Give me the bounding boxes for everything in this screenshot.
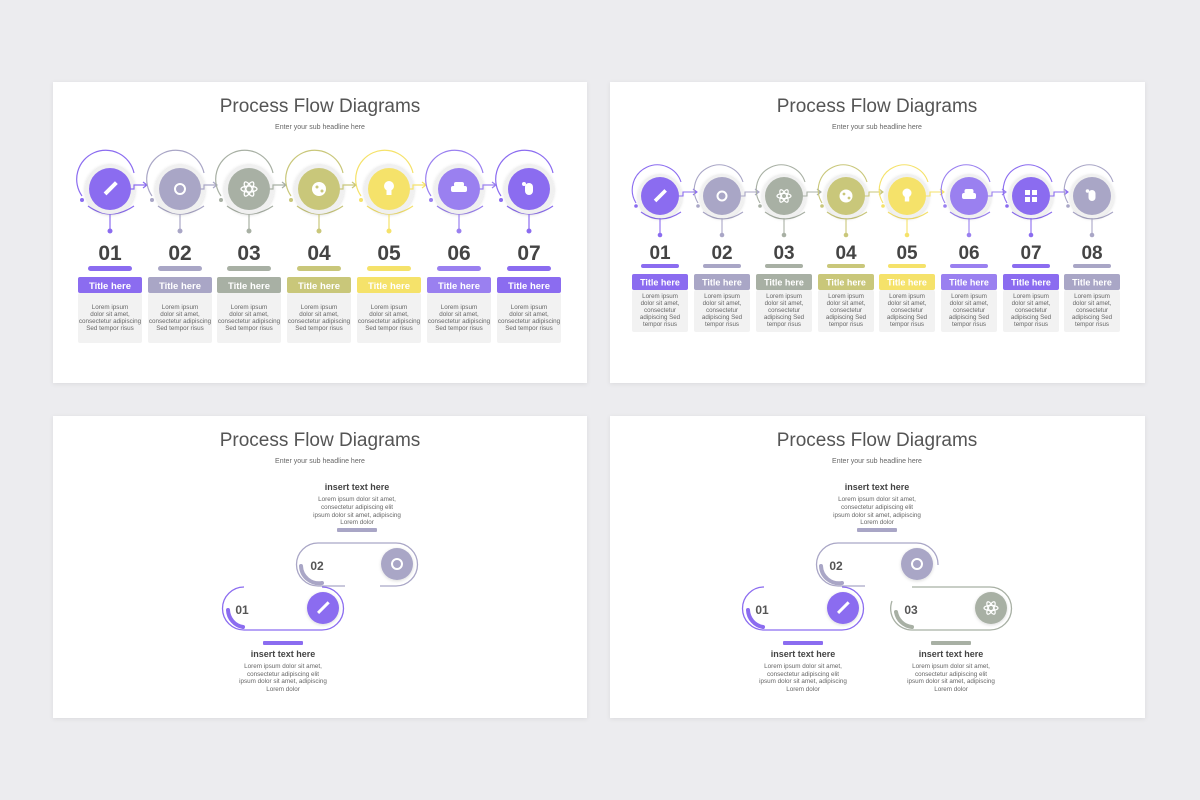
text block: top: Lorem ipsum dolor sit amet, <box>318 496 396 503</box>
step 04: dolor sit amet, <box>299 311 339 318</box>
step 04: Lorem ipsum <box>828 293 864 300</box>
step 05: dolor sit amet, <box>369 311 409 318</box>
step 02: 02 <box>168 242 192 265</box>
step 01 pill: 01 <box>235 603 249 617</box>
text block: bottom: ipsum dolor sit amet, adipiscing <box>239 678 327 685</box>
step 05: 05 <box>377 242 401 265</box>
text block: bottom-left <box>759 641 847 693</box>
text block: bottom-left: consectetur adipiscing elit <box>767 671 839 678</box>
step 05: Title here <box>368 281 410 292</box>
step 04: 04 <box>835 243 857 264</box>
step 05: consectetur adipiscing <box>358 318 421 325</box>
step 07: Lorem ipsum <box>511 304 547 311</box>
step 04: tempor risus <box>829 321 863 328</box>
text block: bottom-right <box>907 641 995 693</box>
step 01 <box>77 150 142 343</box>
text block: top: ipsum dolor sit amet, adipiscing <box>833 512 921 519</box>
step 01: Lorem ipsum <box>642 293 678 300</box>
step 01: tempor risus <box>643 321 677 328</box>
step 07: tempor risus <box>1014 321 1048 328</box>
step 03: adipiscing Sed <box>764 314 805 321</box>
step 04: Title here <box>826 278 866 288</box>
step 01: Lorem ipsum <box>92 304 128 311</box>
arrow <box>865 189 883 196</box>
step 01: consectetur <box>644 307 676 314</box>
text block: bottom: insert text here <box>251 649 315 659</box>
subtitle: Enter your sub headline here <box>275 458 365 465</box>
step 04: adipiscing Sed <box>826 314 867 321</box>
text block: bottom-right: consectetur adipiscing elit <box>915 671 987 678</box>
step 07: Title here <box>1011 278 1051 288</box>
step 02: dolor sit amet, <box>160 311 200 318</box>
step 02: consectetur adipiscing <box>149 318 212 325</box>
step 04: Sed tempor risus <box>295 325 343 332</box>
step 06: Lorem ipsum <box>951 293 987 300</box>
step 01 <box>632 165 688 332</box>
arrow <box>339 182 356 189</box>
step 02: 02 <box>711 243 733 264</box>
step 02: Title here <box>159 281 201 292</box>
step 03: Title here <box>764 278 804 288</box>
step 02: Title here <box>702 278 742 288</box>
step 04 <box>286 150 351 343</box>
step 03: consectetur adipiscing <box>218 318 281 325</box>
step 08: Lorem ipsum <box>1074 293 1110 300</box>
step 02: dolor sit amet, <box>703 300 742 307</box>
text block: bottom-right: insert text here <box>919 649 983 659</box>
step 04: consectetur adipiscing <box>288 318 351 325</box>
step 02 pill <box>296 543 417 586</box>
step 07: dolor sit amet, <box>1012 300 1051 307</box>
step 03 pill <box>891 587 1012 630</box>
step 01: Sed tempor risus <box>86 325 134 332</box>
step 01: 01 <box>98 242 122 265</box>
step 06: Title here <box>438 281 480 292</box>
text block: bottom-left: insert text here <box>771 649 835 659</box>
text block: top: ipsum dolor sit amet, adipiscing <box>313 512 401 519</box>
panel: top-left 7 steps <box>53 82 587 383</box>
step 03: Sed tempor risus <box>225 325 273 332</box>
step 06: 06 <box>447 242 471 265</box>
arrow <box>269 182 286 189</box>
step 05: dolor sit amet, <box>888 300 927 307</box>
step 08: tempor risus <box>1075 321 1109 328</box>
step 08: Title here <box>1072 278 1112 288</box>
text block: top <box>313 482 401 532</box>
step 05: tempor risus <box>890 321 924 328</box>
step 01: dolor sit amet, <box>90 311 130 318</box>
title: Process Flow Diagrams <box>220 430 420 451</box>
step 07: Lorem ipsum <box>1013 293 1049 300</box>
step 02: Lorem ipsum <box>162 304 198 311</box>
text block: top: Lorem ipsum dolor sit amet, <box>838 496 916 503</box>
step 04: 04 <box>307 242 331 265</box>
step 02: adipiscing Sed <box>702 314 743 321</box>
arrow <box>679 189 697 196</box>
text block: bottom-right: Lorem dolor <box>934 686 968 693</box>
text block: top: insert text here <box>325 482 389 492</box>
arrow <box>988 189 1006 196</box>
step 07: 07 <box>1020 243 1042 264</box>
step 01: consectetur adipiscing <box>79 318 142 325</box>
step 08: 08 <box>1081 243 1103 264</box>
step 06: dolor sit amet, <box>439 311 479 318</box>
step 02 pill: 02 <box>310 559 324 573</box>
step 07 <box>496 150 561 343</box>
step 02 pill: 02 <box>829 559 843 573</box>
step 04: dolor sit amet, <box>827 300 866 307</box>
step 05: consectetur <box>891 307 923 314</box>
step 06: consectetur <box>953 307 985 314</box>
text block: bottom-right: ipsum dolor sit amet, adipiscing <box>907 678 995 685</box>
step 06: adipiscing Sed <box>949 314 990 321</box>
text block: bottom <box>239 641 327 693</box>
title: Process Flow Diagrams <box>220 96 420 117</box>
title: Process Flow Diagrams <box>777 96 977 117</box>
step 06: Title here <box>949 278 989 288</box>
text block: bottom: Lorem ipsum dolor sit amet, <box>244 663 322 670</box>
step 07: Sed tempor risus <box>505 325 553 332</box>
text block: bottom: consectetur adipiscing elit <box>247 671 319 678</box>
step 02 pill <box>816 543 938 586</box>
step 05: Sed tempor risus <box>365 325 413 332</box>
step 03: tempor risus <box>767 321 801 328</box>
step 08: consectetur <box>1076 307 1108 314</box>
step 03: 03 <box>237 242 261 265</box>
step 02: Sed tempor risus <box>156 325 204 332</box>
step 08: adipiscing Sed <box>1072 314 1113 321</box>
step 05: Title here <box>887 278 927 288</box>
step 06: dolor sit amet, <box>950 300 989 307</box>
step 04: Lorem ipsum <box>301 304 337 311</box>
step 07: 07 <box>517 242 541 265</box>
arrow <box>741 189 759 196</box>
step 08: dolor sit amet, <box>1073 300 1112 307</box>
step 05: Lorem ipsum <box>889 293 925 300</box>
step 04: consectetur <box>830 307 862 314</box>
arrow <box>200 182 217 189</box>
arrow <box>130 182 147 189</box>
step 04: Title here <box>298 281 340 292</box>
step 02 <box>694 165 750 332</box>
step 03: Lorem ipsum <box>766 293 802 300</box>
step 07: adipiscing Sed <box>1011 314 1052 321</box>
subtitle: Enter your sub headline here <box>832 458 922 465</box>
step 01 pill: 01 <box>755 603 769 617</box>
step 01: Title here <box>89 281 131 292</box>
arrow <box>926 189 944 196</box>
step 05: Lorem ipsum <box>371 304 407 311</box>
step 03: dolor sit amet, <box>765 300 804 307</box>
step 01: 01 <box>649 243 671 264</box>
step 06 <box>941 165 997 332</box>
step 02 <box>147 150 212 343</box>
text block: top: consectetur adipiscing elit <box>321 504 393 511</box>
step 07: dolor sit amet, <box>509 311 549 318</box>
step 01: adipiscing Sed <box>640 314 681 321</box>
step 01: Title here <box>640 278 680 288</box>
text block: bottom-left: ipsum dolor sit amet, adipiscing <box>759 678 847 685</box>
step 03 <box>756 165 812 332</box>
step 02: consectetur <box>706 307 738 314</box>
step 05: 05 <box>896 243 918 264</box>
text block: bottom-left: Lorem dolor <box>786 686 820 693</box>
text block: top: consectetur adipiscing elit <box>841 504 913 511</box>
step 05 <box>356 150 421 343</box>
step 07: Title here <box>508 281 550 292</box>
step 07: consectetur adipiscing <box>498 318 561 325</box>
step 06: consectetur adipiscing <box>428 318 491 325</box>
step 02: Lorem ipsum <box>704 293 740 300</box>
text block: top <box>833 482 921 532</box>
arrow <box>803 189 821 196</box>
step 05 <box>879 165 935 332</box>
arrow <box>1050 189 1068 196</box>
step 01: dolor sit amet, <box>641 300 680 307</box>
step 06: Sed tempor risus <box>435 325 483 332</box>
arrow <box>479 182 496 189</box>
arrow <box>409 182 426 189</box>
text block: top: insert text here <box>845 482 909 492</box>
step 01 pill <box>222 587 344 630</box>
step 07: consectetur <box>1015 307 1047 314</box>
step 04 <box>818 165 874 332</box>
step 06: tempor risus <box>952 321 986 328</box>
step 05: adipiscing Sed <box>887 314 928 321</box>
panel: bottom-right 3 steps <box>610 416 1145 718</box>
text block: top: Lorem dolor <box>340 519 374 526</box>
step 06: Lorem ipsum <box>441 304 477 311</box>
subtitle: Enter your sub headline here <box>832 124 922 131</box>
step 02: tempor risus <box>705 321 739 328</box>
text block: top: Lorem dolor <box>860 519 894 526</box>
step 08 <box>1064 165 1120 332</box>
step 03 <box>216 150 281 343</box>
step 03: Title here <box>228 281 270 292</box>
step 03: dolor sit amet, <box>229 311 269 318</box>
text block: bottom-right: Lorem ipsum dolor sit amet, <box>912 663 990 670</box>
panel: bottom-left 2 steps <box>53 416 587 718</box>
step 03: 03 <box>773 243 795 264</box>
step 06 <box>426 150 491 343</box>
text block: bottom: Lorem dolor <box>266 686 300 693</box>
step 07 <box>1003 165 1059 332</box>
step 03: Lorem ipsum <box>231 304 267 311</box>
step 03 pill: 03 <box>904 603 918 617</box>
text block: bottom-left: Lorem ipsum dolor sit amet, <box>764 663 842 670</box>
step 03: consectetur <box>768 307 800 314</box>
step 06: 06 <box>958 243 980 264</box>
subtitle: Enter your sub headline here <box>275 124 365 131</box>
step 01 pill <box>743 587 864 630</box>
title: Process Flow Diagrams <box>777 430 977 451</box>
panel: top-right 8 steps <box>610 82 1145 383</box>
